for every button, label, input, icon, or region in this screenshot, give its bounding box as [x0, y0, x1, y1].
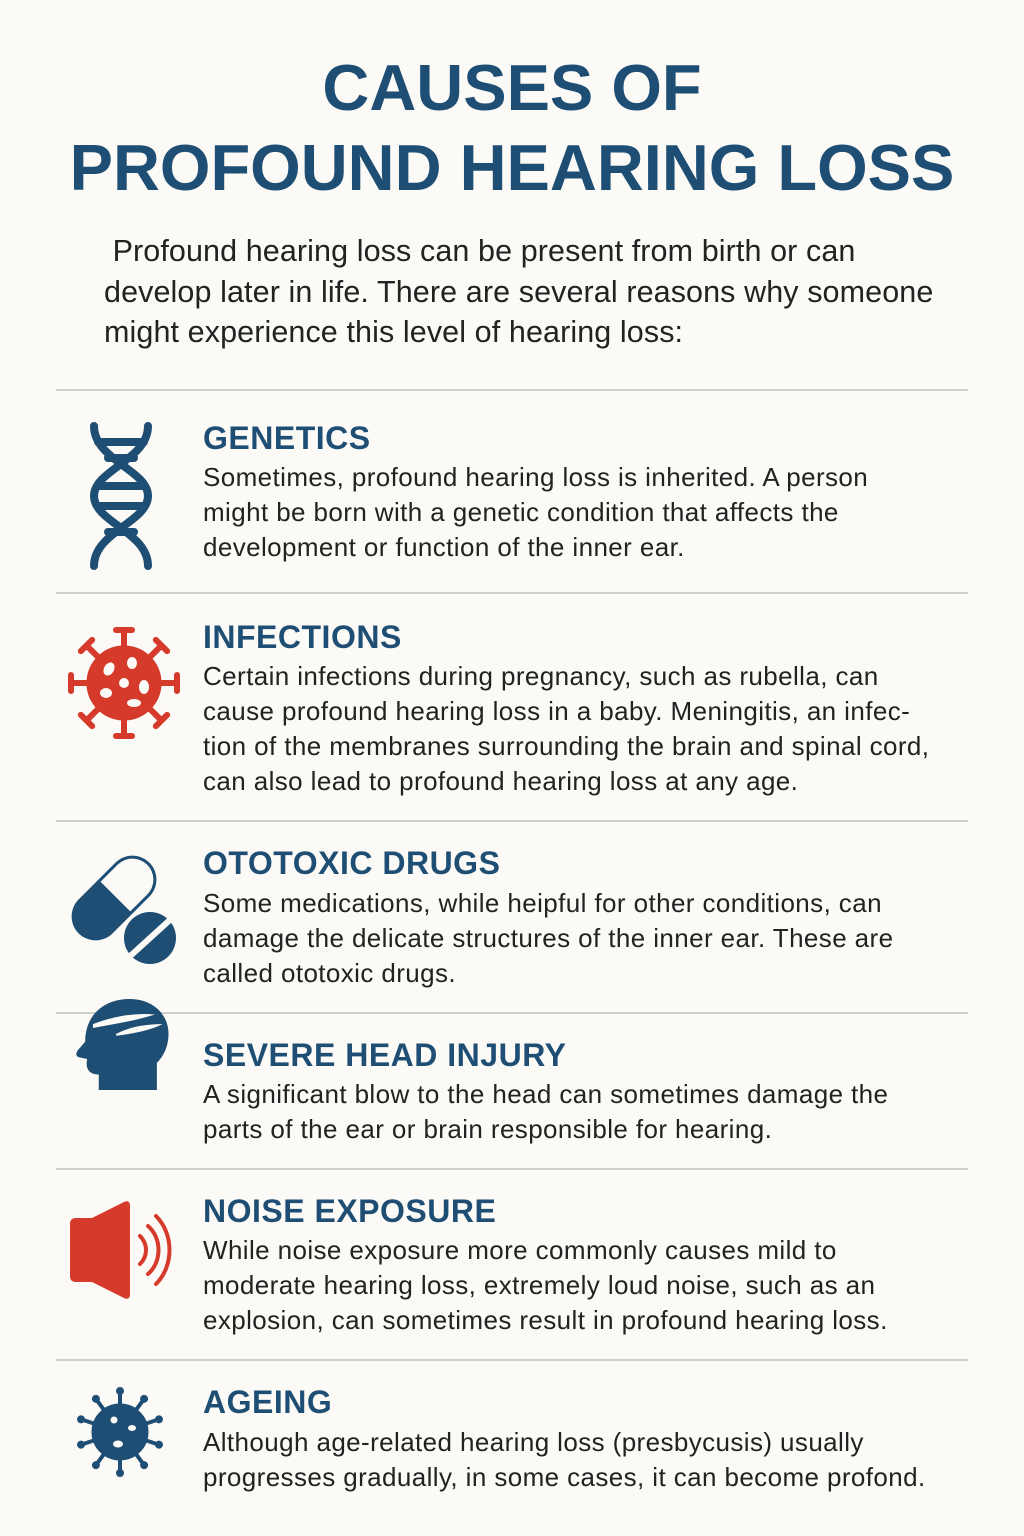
- text: infections: tion of the membranes surrounding the brain and spinal cord,: [203, 731, 929, 761]
- text: ototoxic drugs: damage the delicate structures of the inner ear. These are: [203, 923, 893, 953]
- text: severe head injury: A significant blow to the head can sometimes damage the: [203, 1079, 888, 1109]
- heading: severe head injury: SEVERE HEAD INJURY: [203, 1037, 566, 1073]
- text: genetics: development or function of the inner ear.: [203, 532, 685, 562]
- text: infections: cause profound hearing loss in a baby. Meningitis, an infec-: [203, 696, 910, 726]
- intro text: Profound hearing loss can be present from birth or can: [113, 234, 855, 268]
- text: infections: [203, 661, 929, 796]
- text: infections: can also lead to profound hearing loss at any age.: [203, 766, 798, 796]
- text: genetics: Sometimes, profound hearing loss is inherited. A person: [203, 462, 868, 492]
- text: ageing: progresses gradually, in some cases, it can become profond.: [203, 1462, 926, 1492]
- icon: dna: [90, 422, 152, 570]
- icon: virus red: [68, 627, 180, 739]
- text: infections: Certain infections during pregnancy, such as rubella, can: [203, 661, 879, 691]
- text: noise exposure: [203, 1235, 888, 1335]
- title: PROFOUND HEARING LOSS: [70, 131, 954, 204]
- title: [70, 51, 954, 204]
- text: noise exposure: moderate hearing loss, extremely loud noise, such as an: [203, 1270, 875, 1300]
- text: ageing: Although age-related hearing loss (presbycusis) usually: [203, 1427, 864, 1457]
- heading: ageing: AGEING: [203, 1384, 332, 1420]
- text: ototoxic drugs: [203, 888, 893, 988]
- text: ageing: [203, 1427, 926, 1492]
- icon: speaker: [70, 1201, 172, 1299]
- text: ototoxic drugs: called ototoxic drugs.: [203, 958, 456, 988]
- title: CAUSES OF: [322, 51, 702, 124]
- text: noise exposure: While noise exposure more commonly causes mild to: [203, 1235, 837, 1265]
- icon: head: [76, 999, 168, 1090]
- intro text: [104, 234, 933, 349]
- text: genetics: might be born with a genetic condition that affects the: [203, 497, 839, 527]
- heading: infections: INFECTIONS: [203, 619, 402, 655]
- icon: pills: [72, 856, 176, 964]
- text: severe head injury: [203, 1079, 888, 1144]
- icon: virus blue: [77, 1387, 163, 1477]
- intro text: might experience this level of hearing loss:: [104, 315, 683, 349]
- text: ototoxic drugs: Some medications, while heipful for other conditions, can: [203, 888, 882, 918]
- heading: ototoxic drugs: OTOTOXIC DRUGS: [203, 845, 500, 881]
- heading: noise exposure: NOISE EXPOSURE: [203, 1193, 496, 1229]
- heading: genetics: GENETICS: [203, 420, 371, 456]
- text: genetics: [203, 462, 868, 562]
- text: noise exposure: explosion, can sometimes result in profound hearing loss.: [203, 1305, 888, 1335]
- intro text: develop later in life. There are several reasons why someone: [104, 274, 933, 308]
- text: severe head injury: parts of the ear or brain responsible for hearing.: [203, 1114, 772, 1144]
